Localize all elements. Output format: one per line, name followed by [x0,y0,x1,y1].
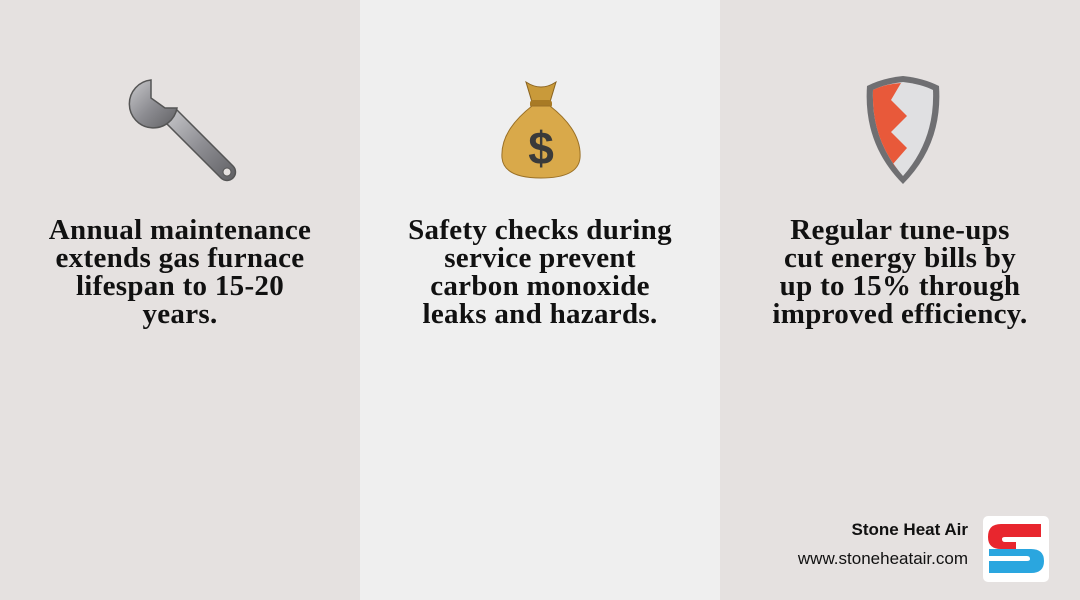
text: maintenance: lifespan to 15-20 [76,270,284,302]
text: maintenance: Annual maintenance [49,214,311,246]
text: efficiency: Regular tune-ups [790,214,1010,246]
text: efficiency: improved efficiency. [772,298,1028,330]
text: safety: service prevent [444,242,636,274]
panel: safety [360,0,720,600]
logo [983,516,1049,582]
text: maintenance: extends gas furnace [56,242,304,274]
text: safety: carbon monoxide [430,270,650,302]
text: safety: leaks and hazards. [422,298,658,330]
brand name: Stone Heat Air [851,520,968,539]
text: maintenance [49,214,311,330]
text: efficiency [772,214,1028,330]
icon: money bag [501,81,581,178]
text: efficiency: up to 15% through [780,270,1020,302]
text: safety: Safety checks during [408,214,672,246]
panel: maintenance [0,0,360,600]
text: efficiency: cut energy bills by [784,242,1016,274]
icon: wrench [128,79,236,182]
text: maintenance: years. [142,298,218,330]
text: safety [408,214,672,330]
panel: efficiency [720,0,1080,600]
icon: money bag: $ [528,122,554,174]
brand block [798,516,1049,582]
icon: shield [866,76,940,184]
brand url: www.stoneheatair.com [798,549,968,568]
